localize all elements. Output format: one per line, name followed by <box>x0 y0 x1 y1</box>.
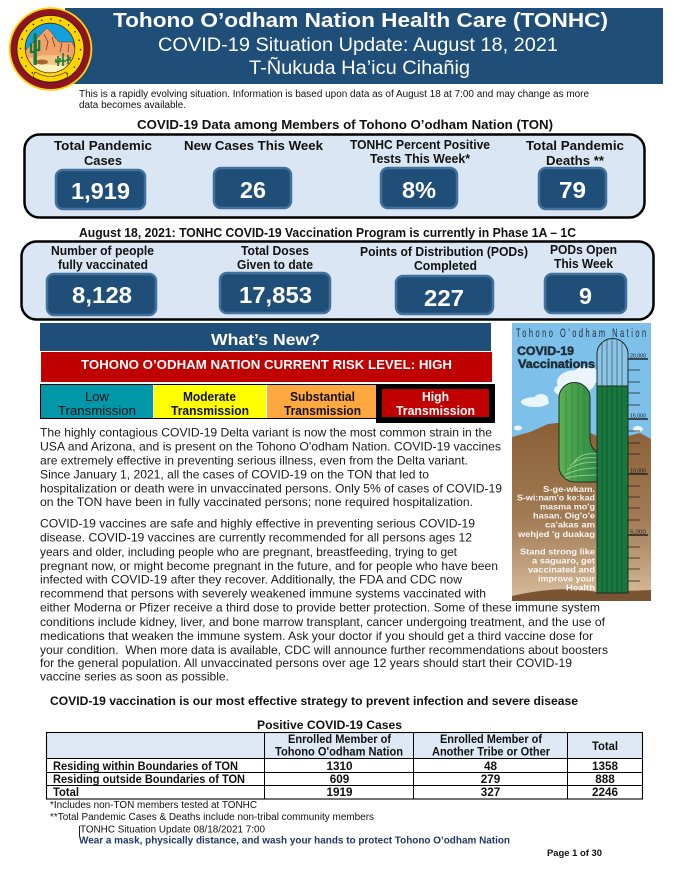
row: residing outside boundaries: 888 <box>595 773 615 786</box>
header banner <box>65 8 663 84</box>
graphic heading: Vaccinations <box>518 359 595 371</box>
stat: total doses: Given to date <box>237 258 313 272</box>
table title: Positive COVID-19 Cases <box>257 718 402 732</box>
stat: total pandemic deaths: Total Pandemic <box>526 138 624 153</box>
stat: PODs completed: 227 <box>424 285 464 311</box>
O'odham message: S-ge-wkam. <box>543 485 595 494</box>
thermometer scale: 5,000 <box>630 530 646 536</box>
stat: total pandemic cases: Cases <box>84 153 122 168</box>
table: positive COVID-19 cases <box>46 732 642 799</box>
text block: vaccine recommendations: years and older, including people who are pregnant, breastfeeding, trying to get <box>40 545 458 559</box>
stat: total pandemic deaths <box>526 138 624 209</box>
row: total: 1919 <box>326 786 353 799</box>
row: residing outside boundaries: 609 <box>330 773 350 786</box>
table header: Another Tribe or Other <box>432 746 550 758</box>
row: residing within boundaries <box>53 760 618 773</box>
text block: vaccine recommendations: vaccine series as soon as possible. <box>40 670 229 684</box>
banner: What's New: What’s New? <box>211 332 320 349</box>
banner: What's New <box>40 323 491 351</box>
O'odham message: S-wi:nam'o ke:kad <box>517 494 595 502</box>
row: total: 327 <box>481 786 500 799</box>
level: high (current) <box>376 384 495 423</box>
update stamp: TONHC Situation Update 08/18/2021 7:00 <box>80 825 266 836</box>
text block: Delta variant: Since January 1, 2021, all the cases of COVID-19 on the TON that led to <box>40 467 429 481</box>
stat: percent positive: TONHC Percent Positive <box>350 138 490 152</box>
stat: fully vaccinated <box>47 244 156 315</box>
O'odham message: ca'akas am <box>545 520 595 530</box>
footnotes: *Includes non-TON members tested at TONHC <box>50 800 257 811</box>
row: residing outside boundaries: Residing outside Boundaries of TON <box>53 773 245 786</box>
row: residing within boundaries: Residing within Boundaries of TON <box>53 760 238 773</box>
level: moderate: Transmission <box>171 404 249 418</box>
text block: Delta variant <box>40 426 502 509</box>
thermometer scale: 15,000 <box>630 414 646 420</box>
text block: vaccine recommendations: pregnant now, or might become pregnant in the future, and for people who have been <box>40 559 498 573</box>
text block: Delta variant: are extremely effective in preventing serious illness, even from the Delta variant. <box>40 454 468 468</box>
level: substantial <box>267 385 377 418</box>
row: total: Total <box>53 786 79 799</box>
thermometer scale: 10,000 <box>630 468 646 474</box>
stat: PODs completed: Completed <box>414 259 477 273</box>
callout: vaccination strategy: COVID-19 vaccination is our most effective strategy to prevent infection and severe disease <box>50 694 578 708</box>
clouds <box>514 366 643 432</box>
text block: Delta variant: The highly contagious COVID-19 Delta variant is now the most common strain in the <box>40 426 492 440</box>
text block: vaccine recommendations: either Moderna or Pfizer receive a third dose to provide better protection. Some of these immune system <box>40 601 600 615</box>
stat: PODs completed <box>360 245 528 314</box>
cactus arm <box>559 382 597 482</box>
thermometer scale <box>628 354 648 581</box>
banner: current risk level <box>41 352 492 382</box>
infographic: cactus vaccination thermometer <box>512 323 651 601</box>
stat: new cases this week <box>184 138 324 208</box>
stat: new cases this week: New Cases This Week <box>184 138 324 153</box>
text block: Delta variant: on the TON have been in fully vaccinated persons; none required hospitalization. <box>40 495 473 509</box>
text block: vaccine recommendations: conditions include kidney, liver, and bone marrow transplant, cancer undergoing treatment, and the use of <box>40 615 606 629</box>
level: high (current): Transmission <box>396 404 475 418</box>
panel: COVID-19 data <box>24 134 644 218</box>
row: residing outside boundaries <box>53 773 615 786</box>
stat: total pandemic deaths: Deaths ** <box>546 153 605 168</box>
text block: vaccine recommendations: recommend that persons with severely weakened immune systems vaccinated with <box>40 587 486 601</box>
table header: Enrolled Member of <box>288 733 391 746</box>
stat: PODs open this week: 9 <box>579 283 592 309</box>
stat: fully vaccinated: fully vaccinated <box>58 258 148 272</box>
intro note: This is a rapidly evolving situation. Information is based upon data as of August 18 at 7:00 and may change as more <box>79 89 590 100</box>
text block: vaccine recommendations: for the general population. All unvaccinated persons over age 12 years should start their COVID-19 <box>40 656 572 670</box>
stat: total pandemic cases: Total Pandemic <box>54 138 152 153</box>
level: low: Low <box>85 390 110 404</box>
text block: vaccine recommendations <box>40 517 608 684</box>
text block: vaccine recommendations: medications that weaken the immune system. Ask your doctor if you should get a third vaccine dose for <box>40 629 593 643</box>
stat: percent positive <box>350 138 490 208</box>
row: residing within boundaries: 48 <box>484 760 497 773</box>
English message: a saguaro, get <box>532 556 595 566</box>
English message: vaccinated and <box>528 566 595 574</box>
stat: total doses <box>220 244 330 313</box>
O'odham message <box>517 485 596 539</box>
text block: vaccine recommendations: infected with COVID-19 after they recover. Additionally, the FDA and CDC now <box>40 573 462 587</box>
stat: PODs open this week: PODs Open <box>550 243 617 257</box>
row: total <box>53 786 618 799</box>
ground <box>512 422 651 601</box>
stat: fully vaccinated: Number of people <box>51 244 154 258</box>
table header: Total <box>592 740 618 753</box>
cactus trunk <box>597 338 628 386</box>
stat: PODs open this week <box>545 243 626 313</box>
subtitle: date: COVID-19 Situation Update: August 18, 2021 <box>158 34 558 56</box>
text block: vaccine recommendations: COVID-19 vaccines are safe and highly effective in preventing serious COVID-19 <box>40 517 475 531</box>
row: total: 2246 <box>592 786 618 799</box>
O'odham message: wehjed 'g duakag <box>517 530 595 539</box>
stat: total pandemic deaths: 79 <box>559 177 586 203</box>
graphic heading <box>517 346 595 371</box>
English message: Health <box>566 584 595 592</box>
heading: COVID-19 data among members: COVID-19 Data among Members of Tohono O’odham Nation (TON) <box>137 117 553 132</box>
footnotes: **Total Pandemic Cases & Deaths include non-tribal community members <box>50 812 374 823</box>
stat: total pandemic cases <box>54 138 152 209</box>
stat: fully vaccinated: 8,128 <box>72 282 132 308</box>
text block: Delta variant: USA and Arizona, and is present on the Tohono O'odham Nation. COVID-19 vaccines <box>40 440 501 454</box>
English message: improve your <box>538 574 595 584</box>
heading: vaccination program phase: August 18, 2021: TONHC COVID-19 Vaccination Program is currently in Phase 1A – 1C <box>79 226 576 240</box>
safety reminder: Wear a mask, physically distance, and wash your hands to protect Tohono O’odham Nation <box>79 836 510 847</box>
stat: percent positive: 8% <box>402 177 436 203</box>
intro note: data becomes available. <box>79 100 186 111</box>
title: Tohono O’odham Nation Health Care (TONHC) <box>113 10 608 32</box>
table header: Tohono O'odham Nation <box>275 746 403 758</box>
O'odham message: hasan. Oig'o'e <box>533 512 596 520</box>
stat: new cases this week: 26 <box>240 177 266 203</box>
banner: current risk level: TOHONO O’ODHAM NATION CURRENT RISK LEVEL: HIGH <box>81 357 452 372</box>
level: substantial: Substantial <box>290 390 355 404</box>
stat: total doses: Total Doses <box>241 244 309 258</box>
level: low: Transmission <box>58 404 136 418</box>
stat: PODs completed: Points of Distribution (PODs) <box>360 245 528 259</box>
table header <box>275 733 618 758</box>
English message: Stand strong like <box>520 548 596 556</box>
page number: Page 1 of 30 <box>547 848 602 859</box>
intro note <box>79 89 590 111</box>
footnotes <box>50 800 374 823</box>
O'odham message: masma mo'g <box>540 502 595 512</box>
level: moderate: Moderate <box>183 390 236 404</box>
row: residing outside boundaries: 279 <box>481 773 501 786</box>
subtitle: O'odham: T-Ñukuda Ha’icu Cihañig <box>249 55 470 79</box>
stat: total pandemic cases: 1,919 <box>71 178 130 204</box>
level: moderate <box>154 385 266 418</box>
stat: total doses: 17,853 <box>239 282 312 308</box>
thermometer scale: 20,000 <box>630 354 646 360</box>
text block: vaccine recommendations: your condition. When more data is available, CDC will announce further recommendations about boosters <box>40 643 608 657</box>
English message <box>520 548 596 592</box>
level: low <box>41 385 153 418</box>
text block: Delta variant: hospitalization or death were in unvaccinated persons. Only 5% of cases of COVID-19 <box>40 481 502 495</box>
level: substantial: Transmission <box>284 404 361 418</box>
stat: percent positive: Tests This Week* <box>370 152 470 166</box>
table header: Enrolled Member of <box>440 733 542 746</box>
graphic title: Tohono O'odham Nation <box>516 327 646 341</box>
icon: Tohono O'odham Nation seal <box>9 7 92 91</box>
row: residing within boundaries: 1310 <box>326 760 353 773</box>
graphic heading: COVID-19 <box>517 346 574 358</box>
panel: vaccination data <box>22 242 654 320</box>
level: high (current): High <box>422 390 449 404</box>
row: residing within boundaries: 1358 <box>592 760 618 773</box>
transmission level scale <box>40 384 495 423</box>
stat: PODs open this week: This Week <box>554 257 614 271</box>
text block: vaccine recommendations: disease. COVID-19 vaccines are currently recommended for all persons ages 12 <box>40 531 472 545</box>
